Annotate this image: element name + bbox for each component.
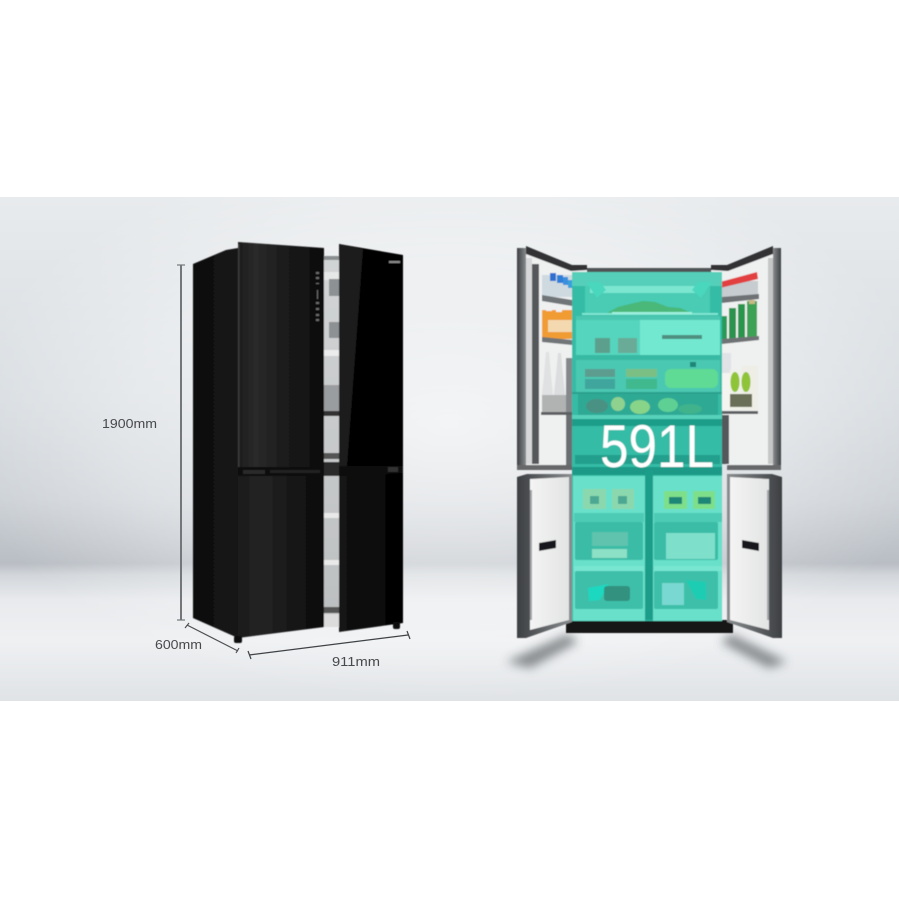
- height dimension line: [177, 265, 185, 620]
- width label: 911mm: [332, 654, 380, 669]
- refrigerator side panel: [193, 248, 238, 638]
- upper right door: [339, 244, 403, 466]
- food container shelf: [576, 360, 720, 392]
- left door shelf: water bottles: [542, 273, 572, 306]
- upper left door: [238, 242, 324, 468]
- lower right door: [339, 471, 403, 632]
- crisper drawer with vegetables: [578, 394, 718, 415]
- door handle gap: [238, 466, 403, 476]
- fridge shelf with salad plate: [576, 301, 720, 320]
- brand mark: [389, 261, 400, 263]
- teal capacity volume: [572, 272, 722, 621]
- open interior gap: [324, 256, 340, 627]
- door edge highlight: [238, 244, 240, 636]
- depth dimension line: [185, 623, 239, 653]
- right door shelf: green bottles: [722, 300, 759, 344]
- depth label: 600mm: [155, 637, 202, 652]
- lower compartments: [573, 470, 722, 621]
- freezer drawer 2 items: [575, 522, 718, 560]
- freezer door handle left: [539, 540, 556, 551]
- middle shelf bay: [576, 320, 720, 355]
- left refrigerator, doors closed: [193, 242, 403, 643]
- lower left door: [238, 471, 324, 638]
- upper right door: [711, 246, 781, 470]
- width dimension line: [248, 631, 410, 659]
- lower left door: [517, 474, 572, 638]
- floor shadows: [506, 634, 787, 668]
- refrigerator feet: [234, 622, 400, 643]
- capacity label: 591L: [600, 413, 714, 480]
- upper left door: [517, 246, 587, 470]
- left door shelf: clear bottles: [541, 352, 572, 415]
- freezer drawer 3 items: [575, 571, 718, 609]
- right refrigerator, doors open: [506, 246, 787, 668]
- door display panel: [316, 272, 319, 321]
- freezer drawer 1 items: [583, 489, 715, 509]
- cabinet top edge: [587, 268, 711, 272]
- door reflection: [339, 244, 363, 466]
- height label: 1900mm: [102, 416, 157, 431]
- freezer door handle right: [742, 540, 759, 551]
- dark base under cabinet: [566, 620, 733, 633]
- lower right door: [727, 474, 782, 638]
- background band: [0, 197, 899, 701]
- right door shelf: milk cartons: [722, 353, 758, 414]
- right door shelf: red cap bottles: [720, 272, 759, 303]
- left door shelf: orange juice: [542, 306, 572, 345]
